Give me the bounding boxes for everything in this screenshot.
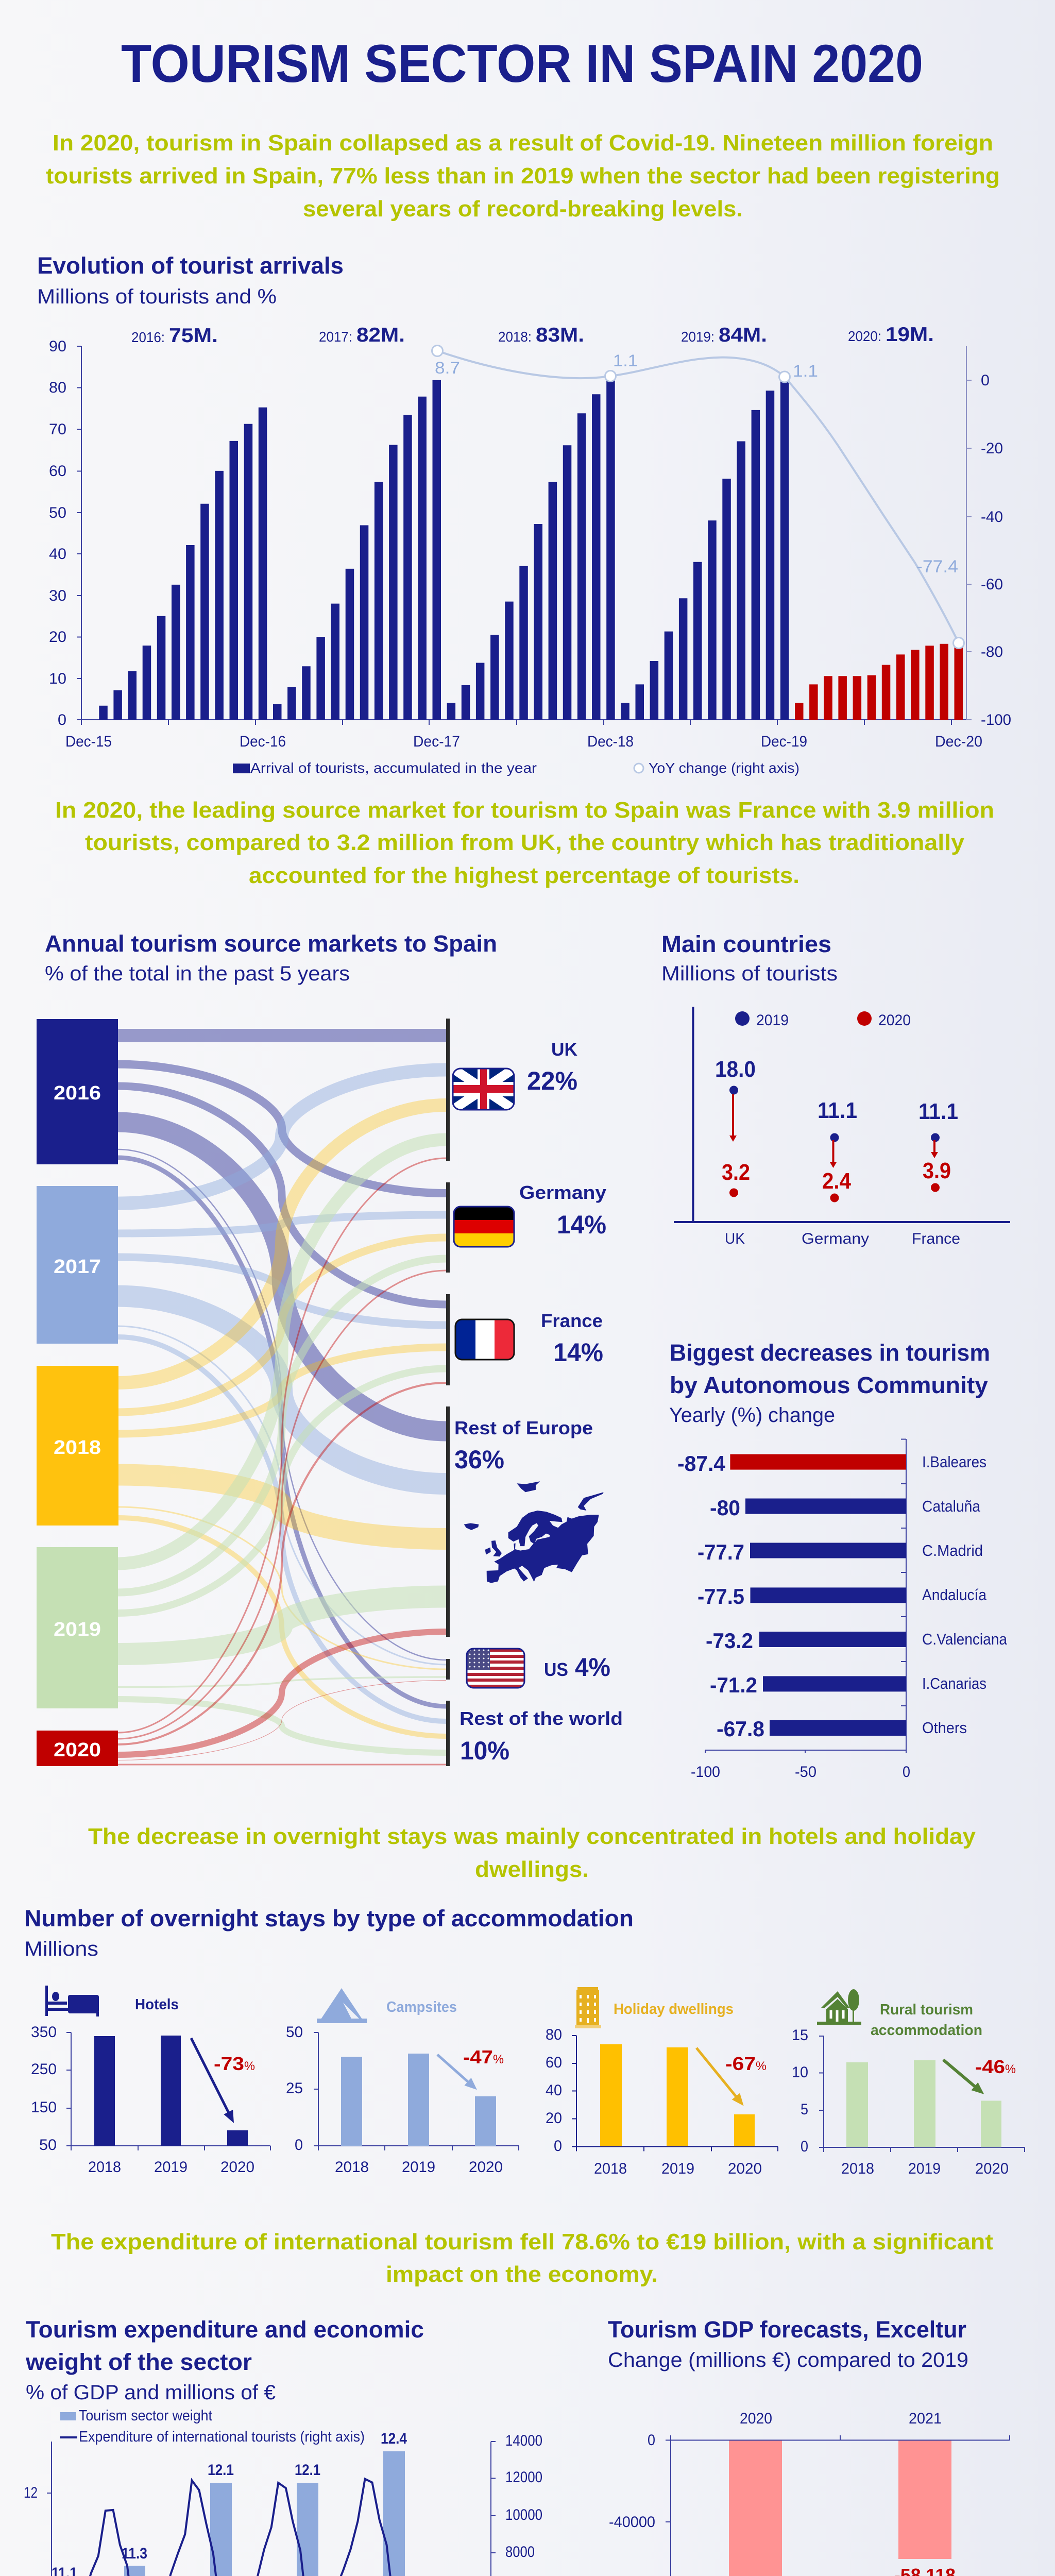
axis labels: 0 (295, 2137, 303, 2154)
callout: -46 (975, 2056, 1005, 2077)
icon: Europe map (464, 1481, 604, 1583)
panel: tourism expenditure and economic weight (24, 2316, 542, 2576)
axis labels (600, 2410, 942, 2576)
axes (66, 2032, 270, 2150)
category labels: I.Baleares (922, 1453, 986, 1471)
callout (725, 2053, 767, 2074)
icon: rural house (817, 1989, 861, 2025)
dots: Germany: Germany (802, 1230, 869, 1247)
annual totals: 2020: (848, 328, 881, 344)
left axis: 20 (49, 629, 66, 646)
dots: UK: 3.2 (722, 1160, 750, 1185)
panel: main countries (661, 931, 1010, 1247)
bars 2020 (795, 644, 963, 720)
text block: leading source market: In 2020, the leading source market for tourism to Spain was France with 3.9 million (55, 798, 994, 823)
bars (729, 2440, 951, 2576)
bars (730, 1454, 906, 1736)
annual totals: 2018: (498, 329, 532, 345)
axis labels: 14000 (505, 2432, 542, 2449)
bars (52, 2451, 405, 2576)
icon: tent (317, 1988, 367, 2023)
value labels: -77.5 (697, 1584, 744, 1608)
axes (691, 1439, 910, 1781)
legend (60, 2408, 365, 2445)
panel: evolution of tourist arrivals (37, 252, 1011, 776)
axis labels: 20 (546, 2110, 562, 2127)
annual totals: 2016: (131, 329, 165, 345)
axis labels (31, 2024, 254, 2176)
year block 2017: 2017 (54, 1256, 101, 1278)
category labels: C.Valenciana (922, 1630, 1008, 1648)
YoY change line (432, 345, 964, 648)
right axis: -80 (981, 643, 1003, 660)
right axis: -40 (981, 509, 1003, 526)
expenditure line (55, 2479, 488, 2576)
axis labels (792, 2027, 1009, 2177)
label: US: US (544, 1659, 568, 1680)
dots: Germany: 11.1 (818, 1098, 857, 1123)
legend (735, 1011, 911, 1029)
annual totals: 84M. (719, 324, 767, 346)
YoY change line: 1.1 (793, 362, 818, 380)
label (871, 2002, 982, 2039)
heading: Main countries (661, 931, 831, 957)
annual totals: 82M. (356, 324, 405, 346)
bar value labels: 12.1 (295, 2462, 320, 2479)
dots: France: 11.1 (918, 1099, 958, 1124)
bars (846, 2060, 1001, 2147)
destination bars (446, 1019, 450, 1766)
label: US: 4% (575, 1653, 610, 1682)
category labels: Andalucía (922, 1586, 987, 1604)
category labels: Others (922, 1719, 967, 1737)
right axis: -20 (981, 440, 1003, 457)
icon: US flag (467, 1649, 524, 1688)
arrow (191, 2038, 229, 2114)
annual totals: 83M. (536, 324, 584, 346)
label: Germany: 14% (557, 1210, 606, 1239)
YoY change line: 1.1 (613, 351, 638, 370)
axis labels: 2020 (728, 2160, 762, 2177)
axis labels: 2020 (469, 2159, 503, 2176)
text block: expenditure: The expenditure of international tourism fell 78.6% to €19 billion, with a significant (51, 2229, 993, 2255)
intro text block (46, 130, 1000, 222)
axis labels (24, 2432, 542, 2576)
panel: biggest decreases by community (669, 1340, 1008, 1781)
axis labels: 50 (39, 2137, 57, 2154)
heading (25, 2316, 424, 2375)
x axis labels: Dec-20 (935, 733, 982, 750)
year block 2019 (37, 1547, 118, 1708)
year block 2017 (37, 1186, 118, 1344)
label: accommodation (871, 2022, 982, 2039)
x axis labels (65, 733, 982, 750)
subheading: Millions (24, 1938, 98, 1960)
axis labels: 2019 (908, 2160, 941, 2177)
dots: UK: 18.0 (715, 1057, 756, 1082)
panel: annual tourism source markets (sankey) (37, 930, 623, 1766)
label: Rest of Europe (454, 1417, 593, 1474)
category labels: I.Canarias (922, 1674, 986, 1692)
chart: rural tourism (792, 1989, 1025, 2177)
category labels: Cataluña (922, 1497, 981, 1515)
label: Holiday dwellings (614, 2001, 734, 2018)
intro text block: tourists arrived in Spain, 77% less than in 2019 when the sector had been registering (46, 163, 1000, 189)
chart: campsites (286, 1988, 519, 2176)
arrow (943, 2060, 976, 2088)
left axis: 60 (49, 463, 66, 480)
heading (670, 1340, 990, 1398)
x axis labels: Dec-15 (65, 733, 112, 750)
heading: Biggest decreases in tourism (670, 1340, 990, 1366)
annual totals: 19M. (886, 324, 934, 346)
flows from 2016 (118, 1036, 446, 1706)
text block: expenditure: impact on the economy. (386, 2262, 658, 2287)
flows from 2019 (118, 1140, 446, 1753)
legend: 2020 (878, 1012, 911, 1029)
axis labels: 12000 (505, 2469, 542, 2486)
axes: -50 (795, 1764, 816, 1781)
axis labels: 2019 (402, 2159, 435, 2176)
callout: % (1005, 2062, 1016, 2076)
subheading: Yearly (%) change (669, 1404, 835, 1427)
x axis labels: Dec-19 (761, 733, 807, 750)
subheading: Millions of tourists and % (37, 285, 277, 308)
icon: German flag (454, 1207, 514, 1247)
flows from 2018 (118, 1105, 446, 1736)
text block: leading source market (55, 798, 994, 888)
left axis: 0 (58, 711, 66, 728)
value labels: -77.7 (697, 1540, 744, 1564)
subheading: Change (millions €) compared to 2019 (608, 2349, 968, 2371)
heading: by Autonomous Community (670, 1372, 988, 1398)
text block: leading source market: accounted for the highest percentage of tourists. (249, 863, 799, 888)
axis labels: 40 (546, 2082, 562, 2099)
heading: Annual tourism source markets to Spain (45, 930, 497, 957)
label: Rest of the world: Rest of the world (460, 1708, 623, 1729)
left axis: 90 (49, 338, 66, 355)
axis labels: 80 (546, 2026, 562, 2043)
subheading: % of GDP and millions of € (26, 2381, 276, 2404)
callout: -67 (725, 2053, 756, 2074)
axes (314, 2032, 519, 2150)
axis labels: 2021 (909, 2410, 942, 2427)
text block: overnight stays: dwellings. (475, 1857, 589, 1882)
callout: -47 (463, 2046, 493, 2067)
heading: Tourism GDP forecasts, Exceltur (608, 2316, 966, 2343)
callout: % (493, 2053, 504, 2066)
chart: holiday dwellings (546, 1987, 778, 2177)
annual totals (131, 324, 934, 347)
year block 2016 (37, 1019, 118, 1164)
label: Germany: Germany (519, 1182, 606, 1203)
label: Campsites (386, 1999, 457, 2015)
annual totals: 75M. (169, 325, 218, 347)
subheading: % of the total in the past 5 years (45, 962, 350, 985)
callout: % (244, 2059, 255, 2073)
callout (463, 2046, 504, 2067)
callout: % (756, 2059, 767, 2073)
axis labels: 350 (31, 2024, 57, 2041)
left axis: 80 (49, 379, 66, 396)
bars 2015-2019 (99, 376, 789, 720)
icon: UK flag (453, 1069, 514, 1110)
x axis labels: Dec-16 (240, 733, 286, 750)
year block 2018: 2018 (54, 1437, 101, 1459)
title: TOURISM SECTOR IN SPAIN 2020 (121, 34, 923, 94)
left axis: 10 (49, 670, 66, 687)
text block: overnight stays: The decrease in overnight stays was mainly concentrated in hotels and holiday (88, 1824, 976, 1849)
axis labels: 15 (792, 2027, 808, 2044)
arrow (437, 2055, 469, 2083)
left axis (49, 338, 971, 728)
heading: Tourism expenditure and economic (26, 2316, 424, 2343)
year block 2020: 2020 (54, 1739, 101, 1761)
chart: hotels (31, 1986, 270, 2176)
bar value labels: 12.1 (208, 2462, 234, 2479)
heading: Number of overnight stays by type of accommodation (24, 1905, 634, 1931)
bars (94, 2036, 248, 2146)
dots: UK (715, 1057, 756, 1247)
legend: YoY change (right axis) (649, 760, 799, 776)
category labels: C.Madrid (922, 1541, 983, 1560)
label: UK: UK (551, 1039, 577, 1060)
axis labels: 8000 (505, 2544, 535, 2561)
value labels: -80 (710, 1496, 740, 1520)
label: UK (527, 1039, 577, 1095)
axis labels: 25 (286, 2080, 303, 2097)
axis labels: 2020 (740, 2410, 772, 2427)
legend: Tourism sector weight (79, 2408, 212, 2424)
flows from 2017 (118, 1070, 446, 1721)
subheading: Millions of tourists (661, 962, 838, 985)
axes: -100 (691, 1764, 720, 1781)
legend (233, 760, 799, 776)
axis labels: 10 (792, 2064, 808, 2081)
bar value labels: 11.3 (122, 2545, 147, 2562)
dots: France (912, 1099, 960, 1247)
value labels (677, 1451, 764, 1741)
left axis: 40 (49, 546, 66, 563)
label: Germany (519, 1182, 606, 1239)
axes (666, 2435, 1010, 2576)
axes: 0 (903, 1764, 910, 1781)
callout (975, 2056, 1016, 2077)
bar value labels: 12.4 (381, 2430, 407, 2447)
dots: UK: UK (725, 1230, 745, 1247)
year block 2016: 2016 (54, 1082, 101, 1104)
x axis labels: Dec-18 (587, 733, 634, 750)
text block: expenditure (51, 2229, 993, 2287)
bars (600, 2044, 755, 2146)
year block 2018 (37, 1366, 118, 1526)
panel: tourism GDP forecasts (600, 2316, 1010, 2576)
legend: Expenditure of international tourists (right axis) (79, 2429, 365, 2445)
axis labels (546, 2026, 762, 2177)
YoY change line: -77.4 (916, 557, 958, 577)
legend: Arrival of tourists, accumulated in the year (250, 760, 537, 776)
value labels: -71.2 (710, 1673, 757, 1697)
axis labels: 0 (801, 2138, 808, 2155)
axis labels: 5 (801, 2101, 808, 2118)
bars (341, 2054, 496, 2146)
intro text block: several years of record-breaking levels. (303, 196, 743, 222)
label: Hotels (135, 1996, 179, 2013)
left axis: 50 (49, 504, 66, 521)
year block 2019: 2019 (54, 1619, 101, 1640)
right axis (966, 346, 1011, 728)
text block: leading source market: tourists, compared to 3.2 million from UK, the country which has traditionally (85, 830, 965, 855)
label: France: France (541, 1310, 603, 1331)
label: Rest of the world (460, 1708, 623, 1765)
right axis: 0 (981, 372, 990, 389)
axis labels: 2018 (335, 2159, 369, 2176)
bar value labels (52, 2430, 407, 2576)
annual totals: 2019: (681, 329, 714, 345)
value labels: -67.8 (717, 1717, 764, 1741)
axis labels: 60 (546, 2054, 562, 2071)
axes (674, 1007, 1010, 1222)
left axis: 70 (49, 421, 66, 438)
callout (214, 2053, 255, 2074)
axis labels: 50 (286, 2024, 303, 2041)
callout: -73 (214, 2053, 244, 2074)
axis labels: 2020 (975, 2160, 1009, 2177)
axis labels: 2018 (88, 2159, 121, 2176)
arrow (696, 2048, 737, 2098)
label: Rural tourism (880, 2002, 973, 2018)
intro text block: In 2020, tourism in Spain collapsed as a result of Covid-19. Nineteen million foreign (53, 130, 993, 156)
heading: Evolution of tourist arrivals (37, 252, 344, 279)
flows from 2020 (118, 1158, 446, 1765)
x axis labels: Dec-17 (413, 733, 460, 750)
dots: France: 3.9 (923, 1158, 951, 1183)
category labels (922, 1453, 1008, 1737)
axis labels: 2018 (594, 2160, 627, 2177)
axis labels: 150 (31, 2099, 57, 2116)
axis labels: 2019 (154, 2159, 188, 2176)
heading: weight of the sector (25, 2349, 252, 2375)
icon: building (575, 1987, 601, 2028)
axes (572, 2036, 778, 2151)
left axis: 30 (49, 587, 66, 604)
axis labels: 2018 (841, 2160, 874, 2177)
label: Rest of the world: 10% (460, 1736, 509, 1765)
label: Rest of Europe: Rest of Europe (454, 1417, 593, 1438)
axis labels: 12 (24, 2484, 38, 2501)
icon: French flag (455, 1319, 514, 1360)
dots: Germany: 2.4 (822, 1168, 851, 1194)
axis labels: 250 (31, 2061, 57, 2078)
panel: overnight stays by type (24, 1905, 1025, 2177)
axes (47, 2442, 496, 2576)
axis labels: 2020 (220, 2159, 254, 2176)
icon: bed (45, 1986, 99, 2016)
label: France (541, 1310, 603, 1367)
axis labels: 0 (648, 2432, 655, 2449)
dots: Germany (802, 1098, 869, 1247)
dots: France: France (912, 1230, 960, 1247)
axis labels: -40000 (609, 2514, 655, 2531)
annual totals: 2017: (319, 329, 352, 345)
label: US (544, 1653, 610, 1682)
axis labels: 10000 (505, 2506, 542, 2523)
axis labels (286, 2024, 503, 2176)
label: Rest of Europe: 36% (454, 1445, 504, 1474)
axis labels: 0 (554, 2138, 562, 2155)
text block: overnight stays (88, 1824, 976, 1882)
label: UK: 22% (527, 1066, 577, 1095)
year block 2020 (37, 1731, 118, 1766)
YoY change line: 8.7 (435, 359, 460, 377)
right axis: -100 (981, 711, 1011, 728)
value labels: -87.4 (677, 1451, 726, 1476)
legend: 2019 (756, 1012, 789, 1029)
right axis: -60 (981, 576, 1003, 593)
axes (819, 2036, 1025, 2152)
label: France: 14% (553, 1338, 603, 1367)
axis labels: 2019 (661, 2160, 694, 2177)
value labels: -73.2 (706, 1629, 753, 1653)
